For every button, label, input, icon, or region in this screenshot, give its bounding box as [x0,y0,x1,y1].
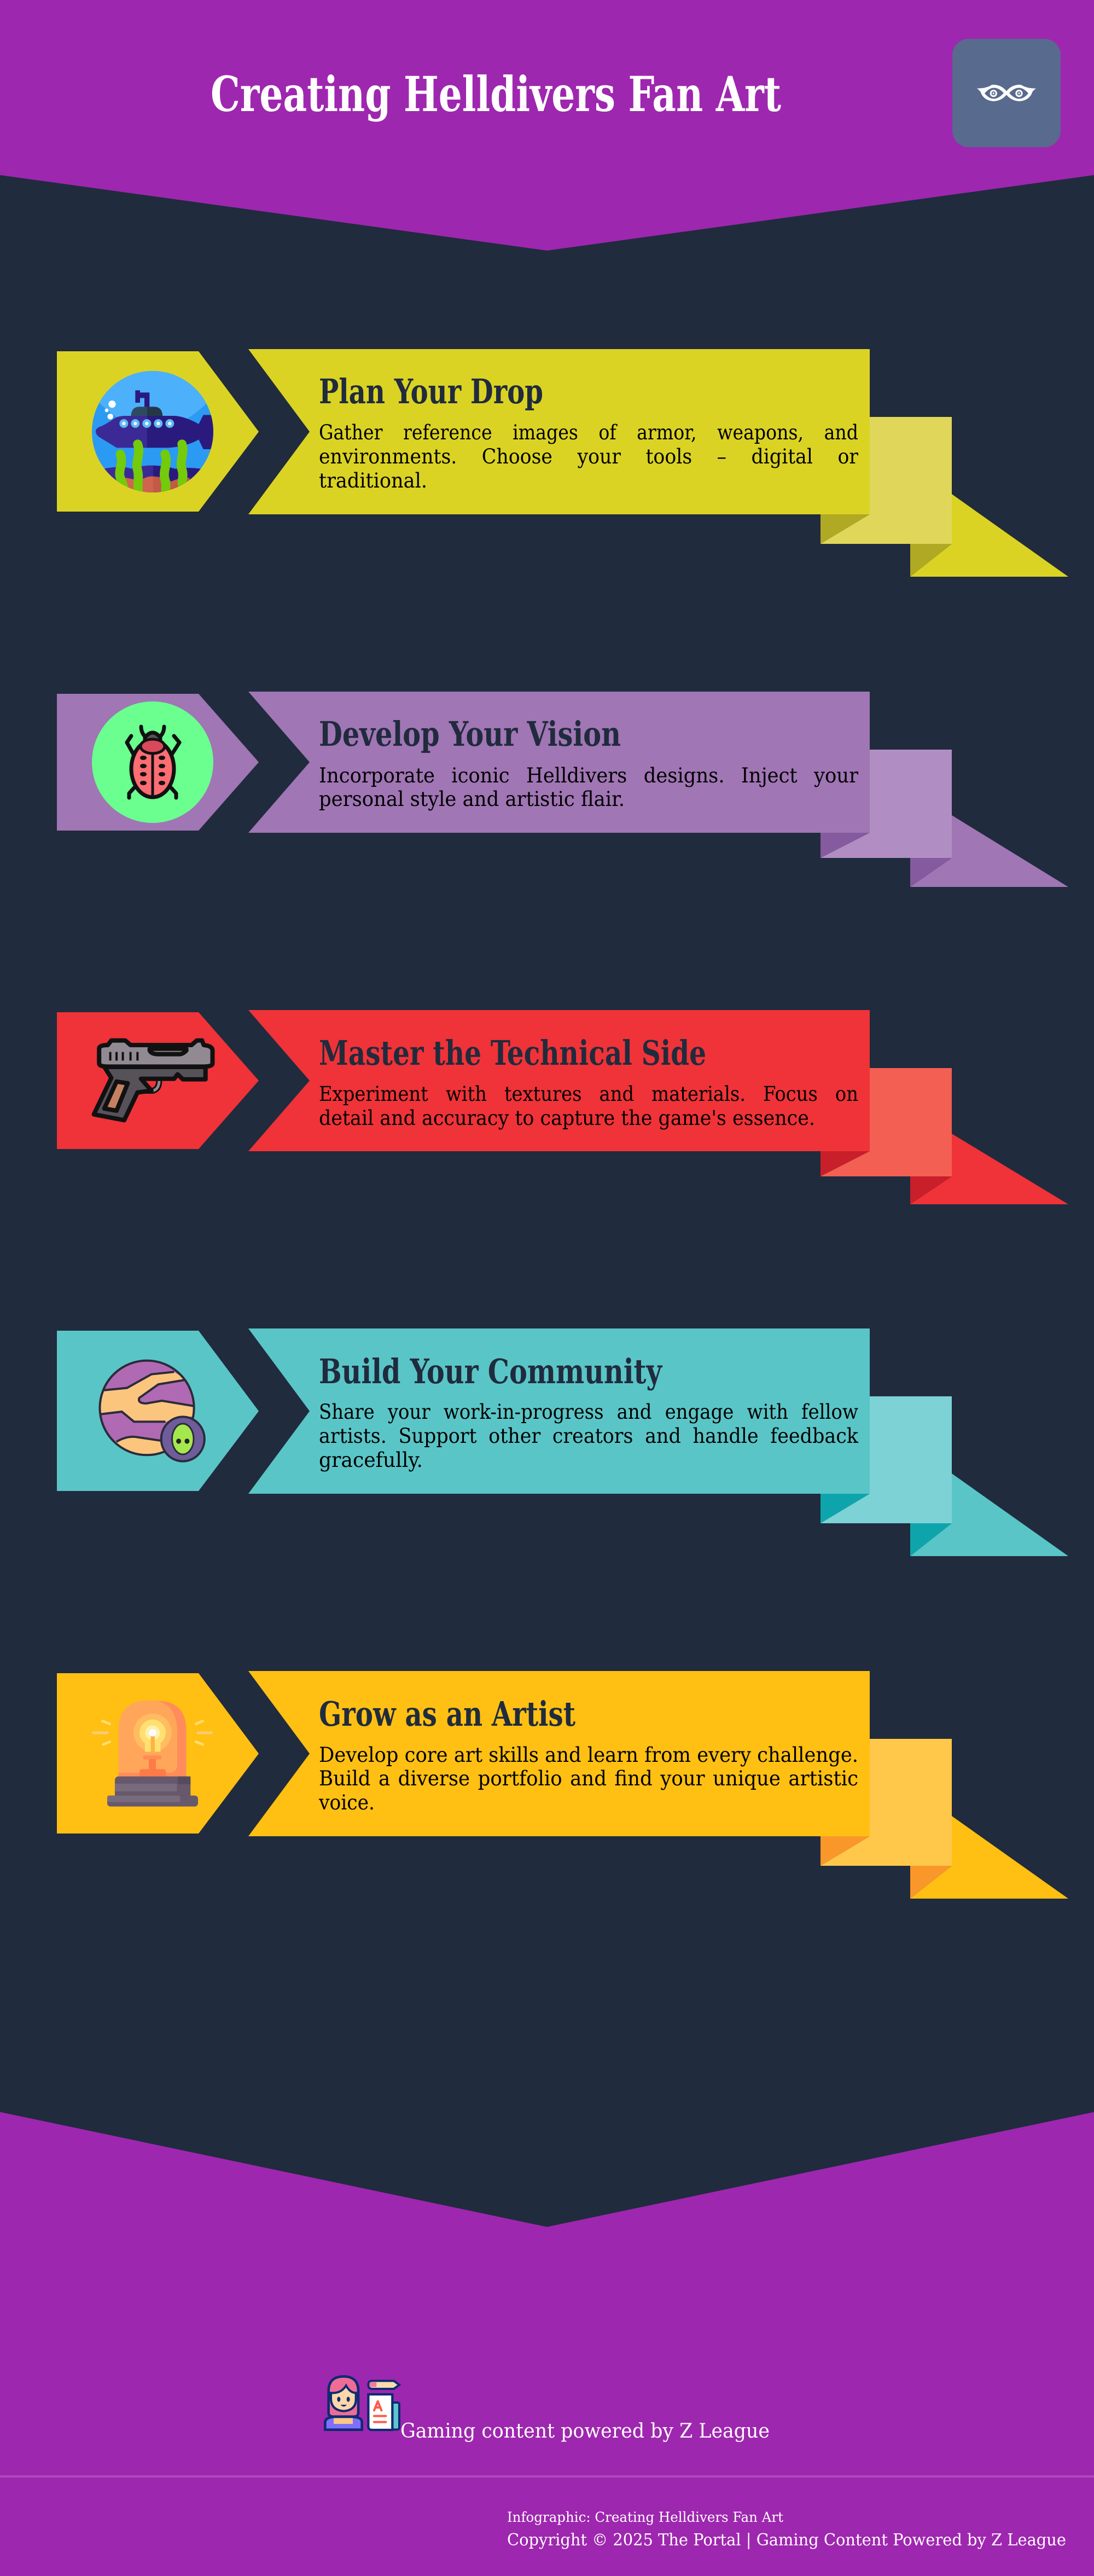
icon panel [57,1673,259,1834]
step 2: Develop Your Vision [57,692,1068,887]
description: detail and accuracy to capture the game's essence. [319,1106,815,1130]
step 3: Master the Technical Side [57,1010,1068,1204]
header band [0,0,1094,251]
description [318,1743,858,1814]
ribbon fold [821,750,1068,887]
ribbon fold [821,1068,1068,1204]
ribbon fold [821,417,1068,577]
ribbon fold [821,1396,1068,1556]
logo badge [952,39,1061,147]
description [319,1400,859,1472]
footer copyright text: Copyright © 2025 The Portal | Gaming Content Powered by Z League [507,2531,1066,2550]
description: Incorporate iconic Helldivers designs. Inject your [319,764,858,787]
ribbon fold [821,1739,1068,1899]
icon: beetle [92,701,213,823]
step 4: Build Your Community [57,1328,1068,1556]
icon panel [57,1331,259,1491]
description: Build a diverse portfolio and find your unique artistic [319,1767,858,1790]
description: Share your work-in-progress and engage with fellow [319,1400,859,1424]
banner [248,349,870,514]
description: personal style and artistic flair. [319,787,625,811]
icon panel [57,351,259,512]
footer band [0,2112,1094,2576]
description: Experiment with textures and materials. Focus on [319,1082,858,1106]
icon: alien planet [99,1361,205,1461]
icon: alarm light [94,1701,212,1807]
heading: Build Your Community [319,1351,662,1391]
title: Creating Helldivers Fan Art [211,66,781,123]
icon: eyes [977,85,1036,101]
heading: Plan Your Drop [319,372,543,411]
icon: pistol [94,1041,212,1120]
description: environments. Choose your tools – digital or [319,445,858,468]
heading: Develop Your Vision [319,714,621,754]
heading: Grow as an Artist [319,1694,575,1734]
description: Gather reference images of armor, weapons, and [319,421,858,444]
description [319,1082,858,1130]
banner [248,1328,870,1494]
heading: Master the Technical Side [319,1033,706,1073]
description [319,421,858,492]
description [319,764,858,811]
powered by line: Gaming content powered by Z League [400,2420,770,2442]
step 5: Grow as an Artist [57,1671,1068,1899]
description: traditional. [319,469,427,492]
description: gracefully. [319,1448,423,1472]
description: Develop core art skills and learn from every challenge. [319,1743,858,1767]
icon panel [57,1012,259,1149]
icon panel [57,694,259,831]
banner [248,1010,870,1151]
banner [248,692,870,833]
icon: submarine [92,371,213,492]
icon: artist with document [325,2376,399,2430]
footer source text: Infographic: Creating Helldivers Fan Art [507,2509,783,2525]
banner [248,1671,870,1836]
description: voice. [318,1791,375,1814]
description: artists. Support other creators and handle feedback [319,1424,859,1448]
step 1: Plan Your Drop [57,349,1068,577]
